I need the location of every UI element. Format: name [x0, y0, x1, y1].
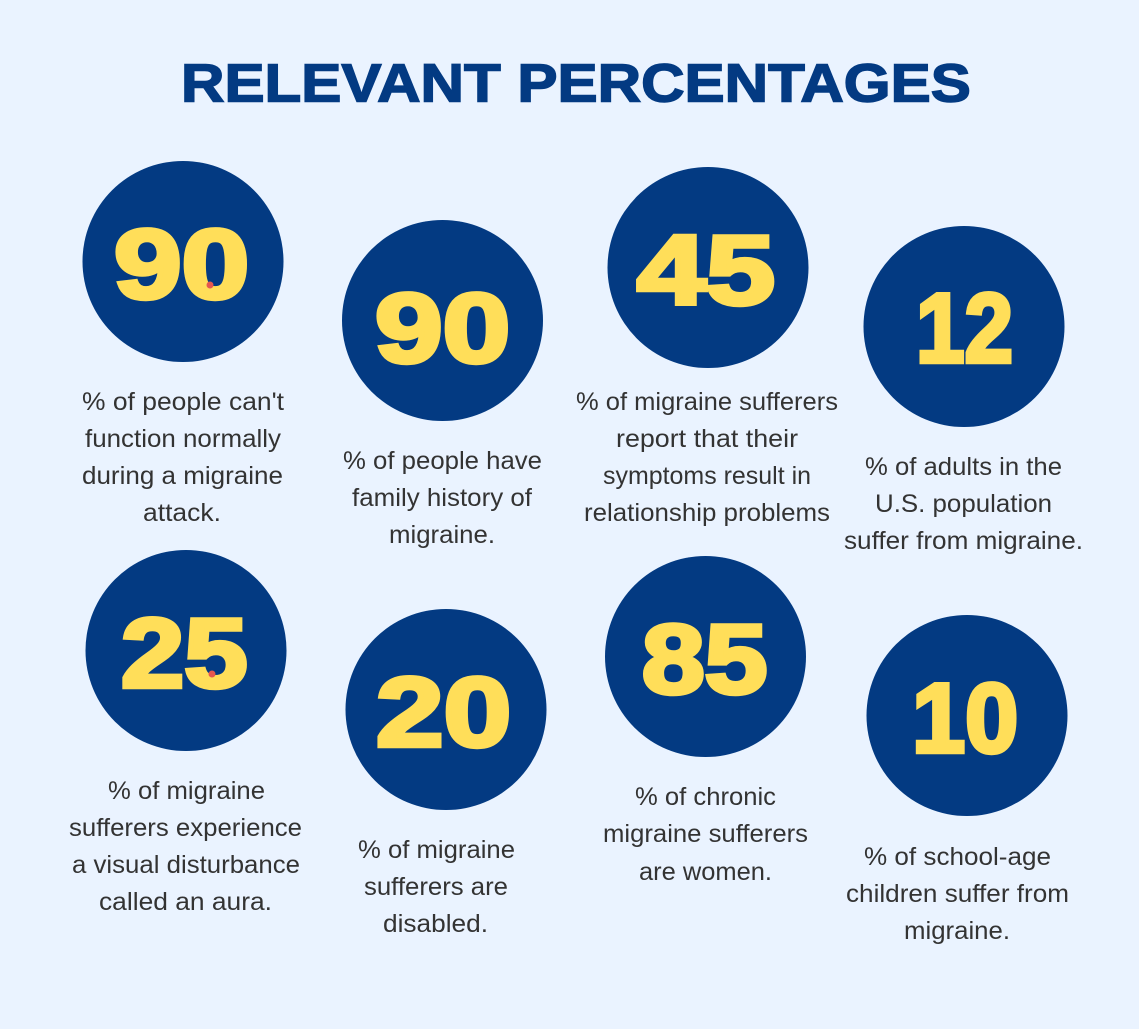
stat: 12 percent of US adults — [844, 226, 1083, 555]
stat: 90 percent cannot function: attack. — [143, 499, 221, 527]
stat: 10 percent school-age children: migraine. — [904, 917, 1010, 945]
stat: 20 percent disabled: disabled. — [383, 910, 488, 938]
stat: 90 percent cannot function — [82, 161, 284, 527]
stat: 10 percent school-age children: % of school-age — [864, 843, 1051, 871]
stat: 25 percent visual aura: called an aura. — [99, 888, 272, 916]
stat: 45 percent relationship problems — [576, 167, 838, 527]
stat: 12 percent of US adults: suffer from migraine. — [844, 527, 1083, 555]
stat: 10 percent school-age children — [846, 615, 1069, 945]
stat: 90 percent family history: 90 — [375, 274, 510, 383]
stat: 85 percent women: migraine sufferers — [603, 820, 808, 848]
stat: 20 percent disabled: % of migraine — [358, 836, 515, 864]
stat: 45 percent relationship problems: 45 — [637, 215, 775, 325]
stat: 85 percent women: % of chronic — [635, 783, 776, 811]
stat: 25 percent visual aura: sufferers experience — [69, 814, 302, 842]
stat: 12 percent of US adults: U.S. population — [875, 490, 1052, 518]
stat: 45 percent relationship problems: report that their — [616, 425, 798, 453]
stat: 90 percent cannot function: during a migraine — [82, 462, 283, 490]
stat: 90 percent cannot function: % of people can't — [82, 388, 284, 416]
stat: 90 percent cannot function: 90 — [114, 210, 249, 319]
stat: 85 percent women — [603, 556, 808, 886]
stat: 25 percent visual aura: % of migraine — [108, 777, 265, 805]
stat: 20 percent disabled — [346, 609, 546, 938]
stat: 12 percent of US adults: 12 — [916, 273, 1013, 383]
stat: 12 percent of US adults: % of adults in the — [865, 453, 1062, 481]
stat: 25 percent visual aura: a visual disturbance — [72, 851, 300, 879]
stat: 90 percent family history: % of people have — [343, 447, 542, 475]
stat: 90 percent family history: migraine. — [389, 521, 495, 549]
title: RELEVANT PERCENTAGES — [181, 53, 971, 114]
stat: 20 percent disabled: sufferers are — [364, 873, 508, 901]
stat: 10 percent school-age children: 10 — [912, 663, 1018, 773]
stat: 45 percent relationship problems: symptoms result in — [603, 462, 811, 490]
stat: 90 percent family history — [342, 220, 543, 549]
stat: 90 percent cannot function: function normally — [85, 425, 282, 453]
stat: 45 percent relationship problems: relationship problems — [584, 499, 830, 527]
stat: 20 percent disabled: 20 — [376, 658, 511, 767]
stat: 90 percent family history: family history of — [352, 484, 532, 512]
stat: 85 percent women: are women. — [639, 858, 772, 886]
stat: 45 percent relationship problems: % of migraine sufferers — [576, 388, 838, 416]
stat: 25 percent visual aura: 25 — [121, 599, 247, 708]
stat: 10 percent school-age children: children suffer from — [846, 880, 1069, 908]
stat: 25 percent visual aura — [69, 550, 302, 916]
stat: 85 percent women: 85 — [642, 605, 767, 714]
